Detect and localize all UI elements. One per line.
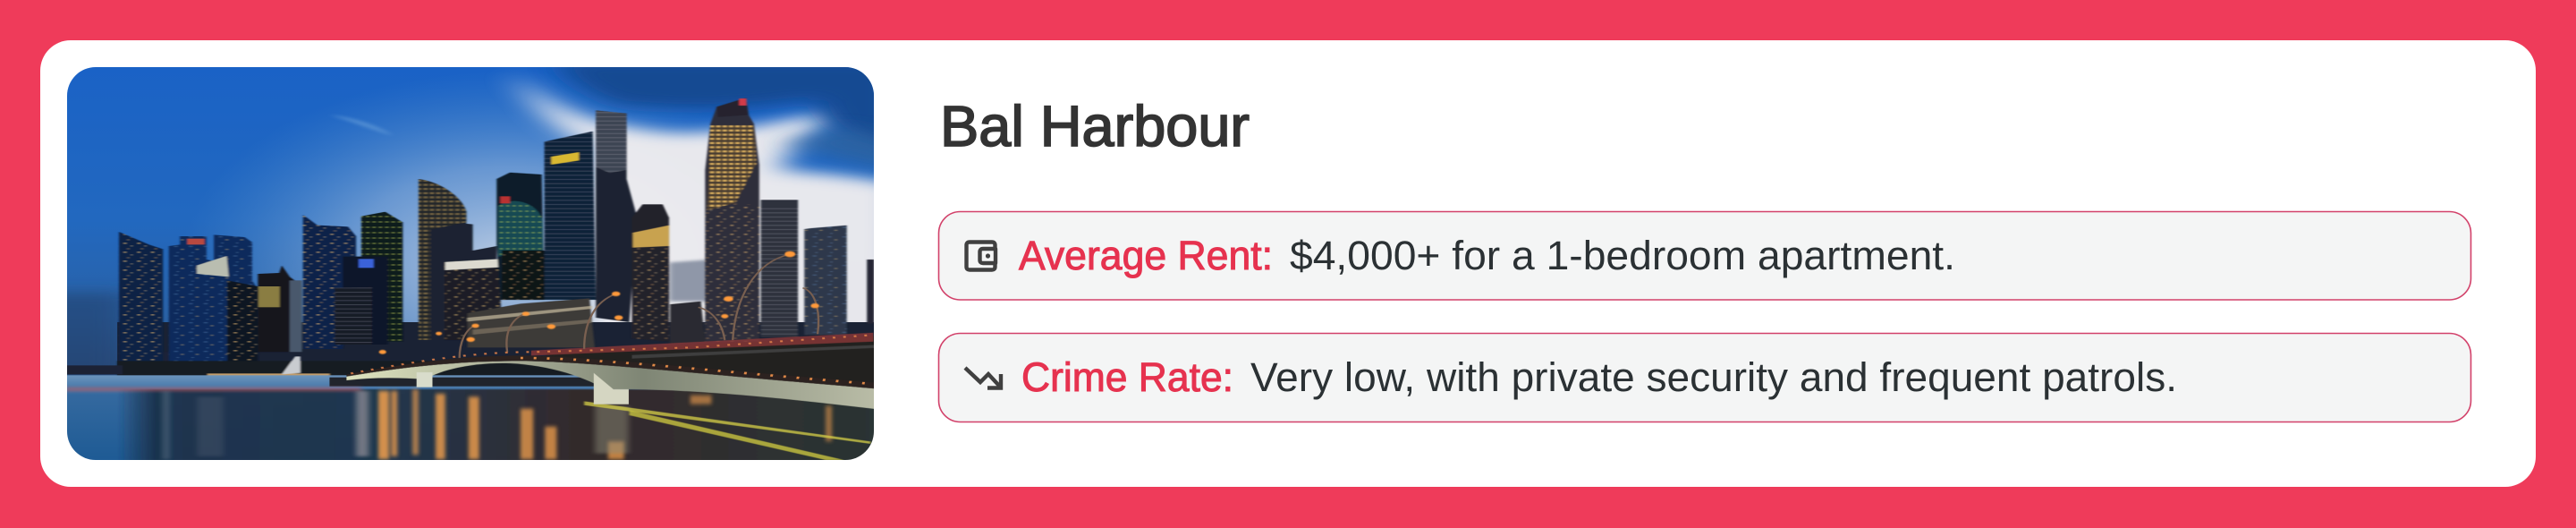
water [54, 375, 886, 464]
info row: average rent [939, 211, 2470, 300]
photo: city skyline at dusk [67, 67, 874, 460]
row background [939, 211, 2470, 300]
sky [67, 67, 874, 376]
title: Bal Harbour [940, 94, 1250, 158]
icon: trending down arrow [965, 368, 1001, 388]
waterfront promenade [67, 356, 573, 376]
info row: crime rate [939, 333, 2470, 422]
value: average rent: $4,000+ for a 1-bedroom apartment. [1290, 233, 1955, 278]
row background [939, 333, 2470, 422]
label: average rent: Average Rent: [1019, 233, 1273, 278]
street lamps and glow [351, 251, 886, 385]
value: crime rate: Very low, with private security and frequent patrols. [1250, 354, 2177, 400]
skyscrapers [119, 98, 875, 367]
label: crime rate: Crime Rate: [1021, 354, 1233, 400]
icon: wallet [966, 242, 996, 270]
shoreline base behind towers [117, 322, 886, 376]
bridge [346, 333, 886, 410]
